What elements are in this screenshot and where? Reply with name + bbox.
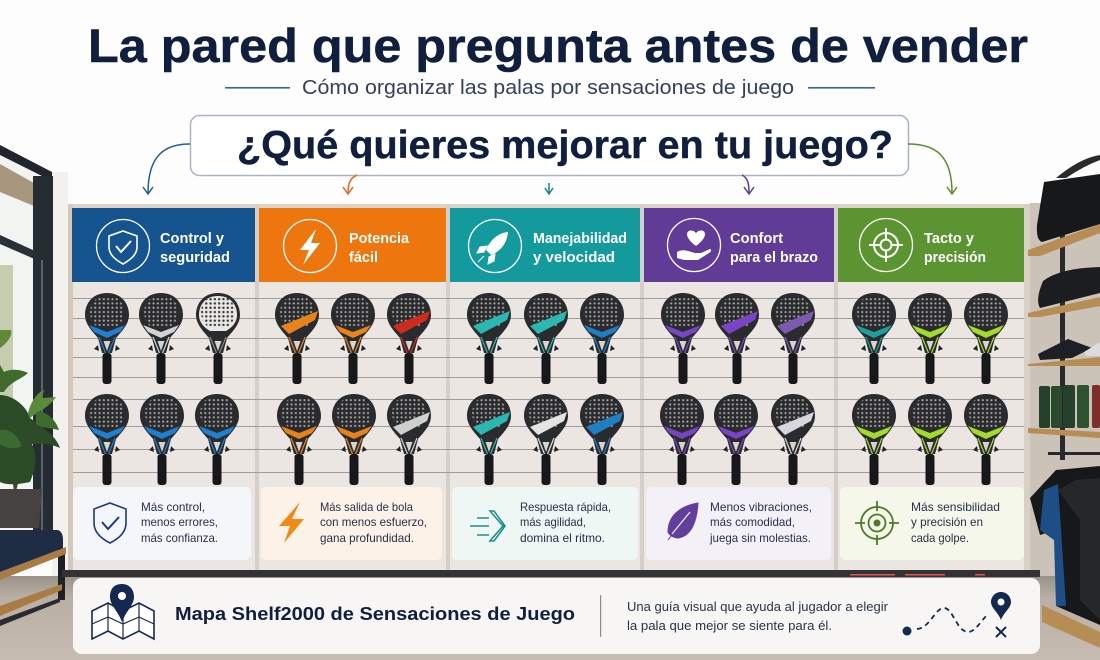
card: potencia: Más salida de bola xyxy=(320,500,413,514)
header: manejabilidad: y velocidad xyxy=(533,250,615,266)
header: potencia: fácil xyxy=(349,250,378,266)
arrow: control xyxy=(143,144,190,194)
question box xyxy=(190,116,908,176)
card: control: más confianza. xyxy=(141,531,218,545)
card: manejabilidad: más agilidad, xyxy=(520,515,586,529)
icon: map with pin xyxy=(92,584,154,639)
plant in pot xyxy=(0,330,60,528)
header: control: Control y xyxy=(160,231,224,247)
card: confort: juega sin molestias. xyxy=(709,531,811,545)
panel: potencia fácil xyxy=(259,208,446,560)
icon: black bag xyxy=(1037,155,1100,242)
slatwall with five zones xyxy=(62,204,1040,577)
bottom banner xyxy=(73,578,1040,654)
card: control xyxy=(73,487,251,560)
icon: ball cans xyxy=(1039,385,1100,428)
question box: ¿Qué quieres mejorar en tu juego? xyxy=(237,124,893,167)
header: control: seguridad xyxy=(160,250,230,266)
banner description: la pala que mejor se siente para él. xyxy=(627,619,832,633)
icon: gear bag xyxy=(1038,267,1100,308)
shelves on the right xyxy=(1028,155,1100,648)
clothes rack xyxy=(1030,452,1100,648)
arrow: tacto xyxy=(908,144,957,194)
rackets: tacto xyxy=(852,293,1008,485)
header: manejabilidad: Manejabilidad xyxy=(533,231,627,247)
header: confort: Confort xyxy=(730,231,783,247)
card: manejabilidad: Respuesta rápida, xyxy=(520,500,611,514)
rackets: manejabilidad xyxy=(467,293,624,485)
card: tacto: Más sensibilidad xyxy=(911,500,1000,514)
header: tacto: precisión xyxy=(924,250,986,266)
window on the left xyxy=(0,145,53,530)
card: confort xyxy=(646,487,831,560)
arrow: confort xyxy=(742,175,754,194)
header: manejabilidad xyxy=(450,208,640,282)
title: La pared que pregunta antes de vender xyxy=(88,19,1028,72)
header: confort xyxy=(644,208,834,282)
icon: shoes xyxy=(1038,339,1100,360)
card: control: Más control, xyxy=(141,500,205,514)
arrow: potencia xyxy=(343,175,357,194)
panel: tacto y precisión xyxy=(838,208,1024,560)
card: confort: más comodidad, xyxy=(710,515,795,529)
card: potencia: gana profundidad. xyxy=(320,531,414,545)
card: manejabilidad xyxy=(452,487,638,560)
render artefacts in the reference xyxy=(850,574,985,576)
header: tacto: Tacto y xyxy=(924,231,974,247)
bench xyxy=(0,530,66,626)
rackets: potencia xyxy=(275,293,431,485)
subtitle: Cómo organizar las palas por sensaciones de juego xyxy=(302,76,794,99)
banner description: Una guía visual que ayuda al jugador a elegir xyxy=(627,600,888,614)
card: potencia: con menos esfuerzo, xyxy=(320,515,427,529)
header: tacto xyxy=(838,208,1024,282)
arrow: manejabilidad xyxy=(545,183,553,194)
rackets: confort xyxy=(660,293,815,485)
header: confort: para el brazo xyxy=(730,250,818,266)
panel: control y seguridad xyxy=(72,208,255,560)
banner heading: Mapa Shelf2000 de Sensaciones de Juego xyxy=(175,603,575,624)
panel: confort para el brazo xyxy=(644,208,834,560)
rackets: control xyxy=(85,293,240,485)
card: tacto: y precisión en xyxy=(911,515,983,529)
header: potencia xyxy=(259,208,446,282)
panel: manejabilidad y velocidad xyxy=(450,208,640,560)
card: tacto xyxy=(840,487,1024,560)
card: potencia xyxy=(261,487,442,560)
card: tacto: cada golpe. xyxy=(911,531,969,545)
card: manejabilidad: domina el ritmo. xyxy=(520,531,605,545)
icon: route to pin xyxy=(902,592,1011,637)
header: potencia: Potencia xyxy=(349,231,410,247)
card: confort: Menos vibraciones, xyxy=(710,500,812,514)
card: control: menos errores, xyxy=(141,515,218,529)
header: control xyxy=(72,208,255,282)
